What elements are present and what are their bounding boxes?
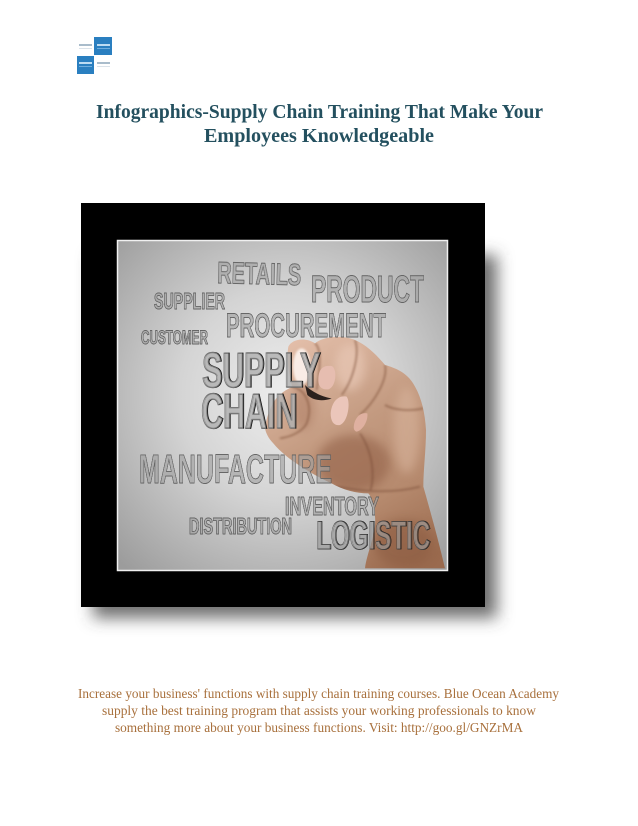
word: PRODUCT: PRODUCT	[311, 269, 424, 311]
pen tip	[305, 385, 332, 400]
black frame	[81, 203, 485, 607]
word: RETAILS: RETAILS	[217, 255, 302, 292]
word: CHAIN: CHAIN	[201, 385, 297, 439]
word: CUSTOMER: CUSTOMER	[141, 328, 208, 349]
title: Infographics-Supply Chain Training That Make Your	[96, 102, 543, 123]
body text: Increase your business' functions with supply chain training courses. Blue Ocean Academy	[78, 686, 559, 701]
body text	[78, 686, 559, 735]
logo	[77, 37, 112, 74]
title	[96, 102, 543, 147]
fingernails	[318, 366, 335, 389]
photo shadow	[93, 255, 497, 618]
word: DISTRIBUTION: DISTRIBUTION	[189, 513, 292, 539]
word: MANUFACTURE: MANUFACTURE	[139, 446, 332, 492]
word: SUPPLIER: SUPPLIER	[154, 288, 225, 314]
hand	[260, 330, 450, 570]
body text: supply the best training program that assists your working professionals to know	[102, 703, 536, 718]
word: LOGISTIC: LOGISTIC	[316, 514, 430, 558]
grey panel	[118, 240, 448, 570]
photo: supply chain words and hand	[81, 203, 485, 607]
word: SUPPLY: SUPPLY	[202, 344, 320, 398]
title: Employees Knowledgeable	[204, 126, 434, 147]
body text: something more about your business functions. Visit: http://goo.gl/GNZrMA	[115, 720, 523, 735]
word: PROCUREMENT: PROCUREMENT	[226, 307, 386, 345]
word: INVENTORY: INVENTORY	[285, 491, 379, 521]
